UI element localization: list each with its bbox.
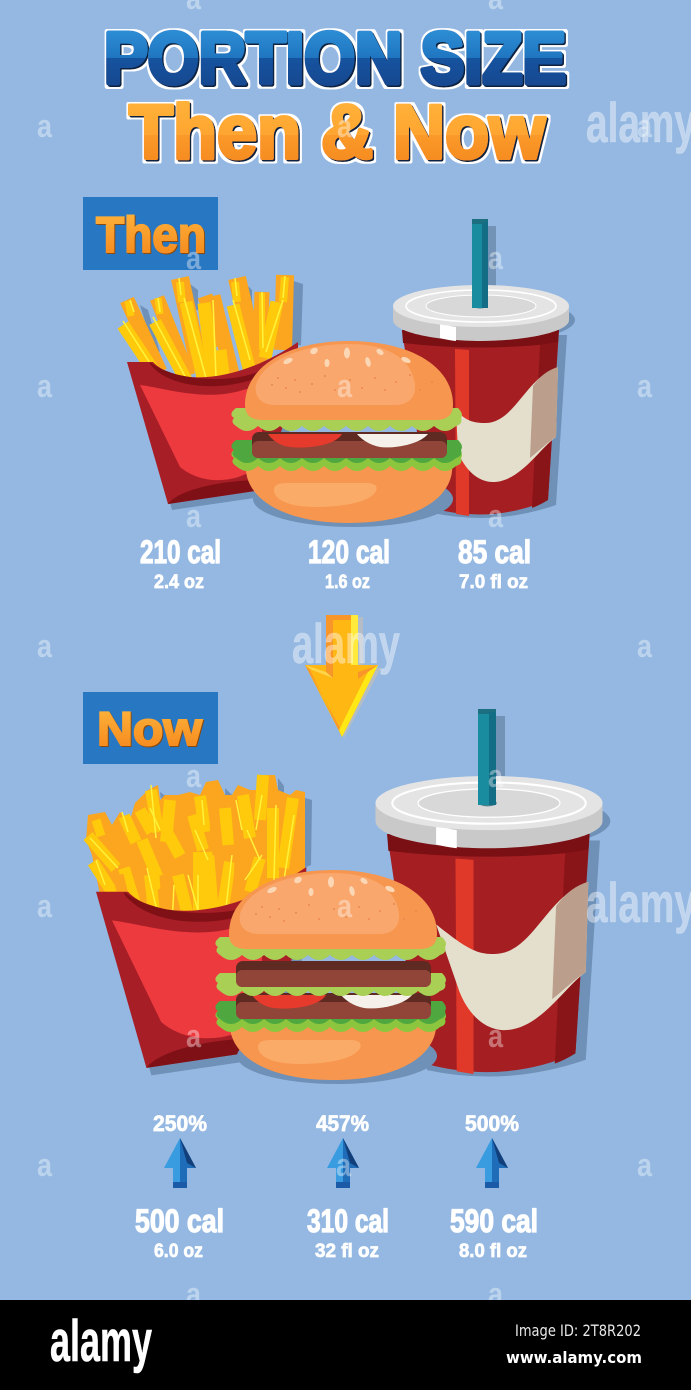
watermarks: a: [488, 498, 503, 534]
watermarks: a: [37, 1147, 52, 1183]
stat: drink increase: [450, 1111, 538, 1262]
watermarks: a: [488, 1276, 503, 1312]
watermarks: a: [336, 1147, 351, 1183]
watermarks: a: [186, 240, 201, 276]
calorie label: then drink: 85 cal: [458, 534, 531, 570]
stat: burger increase: 457%: [316, 1111, 369, 1136]
icon: large fries: [86, 775, 312, 1075]
section label: Then: Then: [96, 207, 206, 263]
watermarks: a: [186, 1276, 201, 1312]
section label: Now: Now: [97, 702, 202, 755]
footer bar: [0, 1300, 691, 1390]
large fries box: [96, 867, 309, 1075]
stat: fries increase: 6.0 oz: [154, 1241, 203, 1262]
watermarks: a: [37, 628, 52, 664]
website: www.alamy.com: [506, 1348, 642, 1367]
calorie label: then drink: [458, 534, 531, 593]
watermarks: a: [637, 628, 652, 664]
stat: fries increase: 250%: [153, 1111, 207, 1136]
icon: large soda cup: [375, 709, 610, 1077]
illustration: then meal: [123, 219, 575, 527]
watermarks: a: [37, 888, 52, 924]
watermarks: a: [637, 1147, 652, 1183]
watermarks: a: [37, 108, 52, 144]
icon: up arrow: [164, 1138, 196, 1188]
arrow: then to now: [305, 615, 381, 738]
watermarks: a: [637, 368, 652, 404]
calorie label: then burger: 1.6 oz: [325, 572, 370, 593]
watermarks: a: [337, 108, 352, 144]
icon: up arrow: [327, 1138, 359, 1188]
watermarks: a: [186, 1018, 201, 1054]
icon: small soda cup: [393, 219, 575, 518]
icon: large double burger: [215, 870, 446, 1084]
calorie label: then burger: 120 cal: [308, 534, 390, 570]
stat: drink increase: 590 cal: [450, 1203, 538, 1239]
fries box: [127, 342, 300, 510]
stat: drink increase: 500%: [465, 1111, 519, 1136]
section label: Now: [83, 692, 218, 764]
title line: Portion Size: PORTION SIZE: [104, 19, 566, 99]
icon: up arrow: [476, 1138, 508, 1188]
illustration: now meal: [86, 709, 610, 1084]
calorie label: then fries: [140, 534, 221, 593]
icon: small fries: [123, 275, 303, 510]
stat: fries increase: 500 cal: [135, 1203, 224, 1239]
watermarks: a: [337, 888, 352, 924]
calorie label: then fries: 2.4 oz: [154, 572, 204, 593]
title: [104, 19, 566, 175]
calorie label: then burger: [308, 534, 390, 593]
watermarks: a: [637, 108, 652, 144]
watermarks: alamy: [292, 612, 400, 675]
stat: fries increase: [135, 1111, 224, 1262]
title line: Then & Now: Then & Now: [129, 90, 546, 175]
stat: burger increase: 32 fl oz: [315, 1241, 379, 1262]
footer logo: alamy: [50, 1309, 152, 1374]
stat: drink increase: 8.0 fl oz: [459, 1241, 527, 1262]
stat: burger increase: [307, 1111, 389, 1262]
watermarks: a: [186, 498, 201, 534]
icon: small burger: [231, 341, 462, 527]
watermarks: a: [488, 758, 503, 794]
section label: Then: [83, 197, 218, 270]
watermarks: a: [488, 240, 503, 276]
watermarks: a: [337, 368, 352, 404]
watermarks: a: [37, 368, 52, 404]
stat: burger increase: 310 cal: [307, 1203, 389, 1239]
watermarks: a: [488, 1018, 503, 1054]
calorie label: then drink: 7.0 fl oz: [459, 572, 528, 593]
calorie label: then fries: 210 cal: [140, 534, 221, 570]
image id: Image ID: 2T8R202: [515, 1321, 641, 1340]
watermarks: a: [186, 758, 201, 794]
